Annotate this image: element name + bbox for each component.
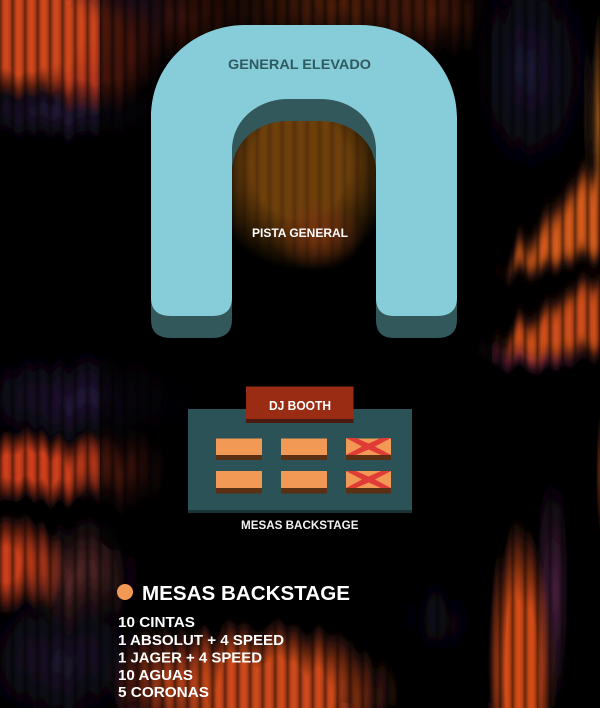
- legend items: 1 ABSOLUT + 4 SPEED: [118, 633, 284, 649]
- backstage platform: [188, 409, 412, 513]
- top face of u-shape: [151, 25, 457, 316]
- crossed out table top: [346, 438, 391, 460]
- legend items: 1 JAGER + 4 SPEED: [118, 650, 262, 666]
- legend heading: MESAS BACKSTAGE: [142, 582, 350, 605]
- legend items: [118, 615, 284, 701]
- extruded side of u-shape: [151, 47, 457, 338]
- backstage floor plan: [188, 386, 412, 532]
- legend dot: [117, 584, 133, 600]
- table row 2: [216, 471, 327, 494]
- general elevado section: [151, 25, 457, 338]
- legend items: 10 CINTAS: [118, 615, 195, 631]
- label: general elevado: GENERAL ELEVADO: [228, 56, 371, 72]
- crossed out table bottom: [346, 471, 391, 494]
- label: mesas backstage: MESAS BACKSTAGE: [241, 518, 358, 532]
- label: pista general: PISTA GENERAL: [252, 226, 348, 240]
- table row 1: [216, 438, 327, 460]
- legend items: 5 CORONAS: [118, 685, 209, 701]
- dj booth: DJ BOOTH: [269, 399, 331, 413]
- dj booth: [246, 386, 354, 423]
- legend items: 10 AGUAS: [118, 668, 193, 684]
- legend: mesas backstage: [117, 582, 350, 701]
